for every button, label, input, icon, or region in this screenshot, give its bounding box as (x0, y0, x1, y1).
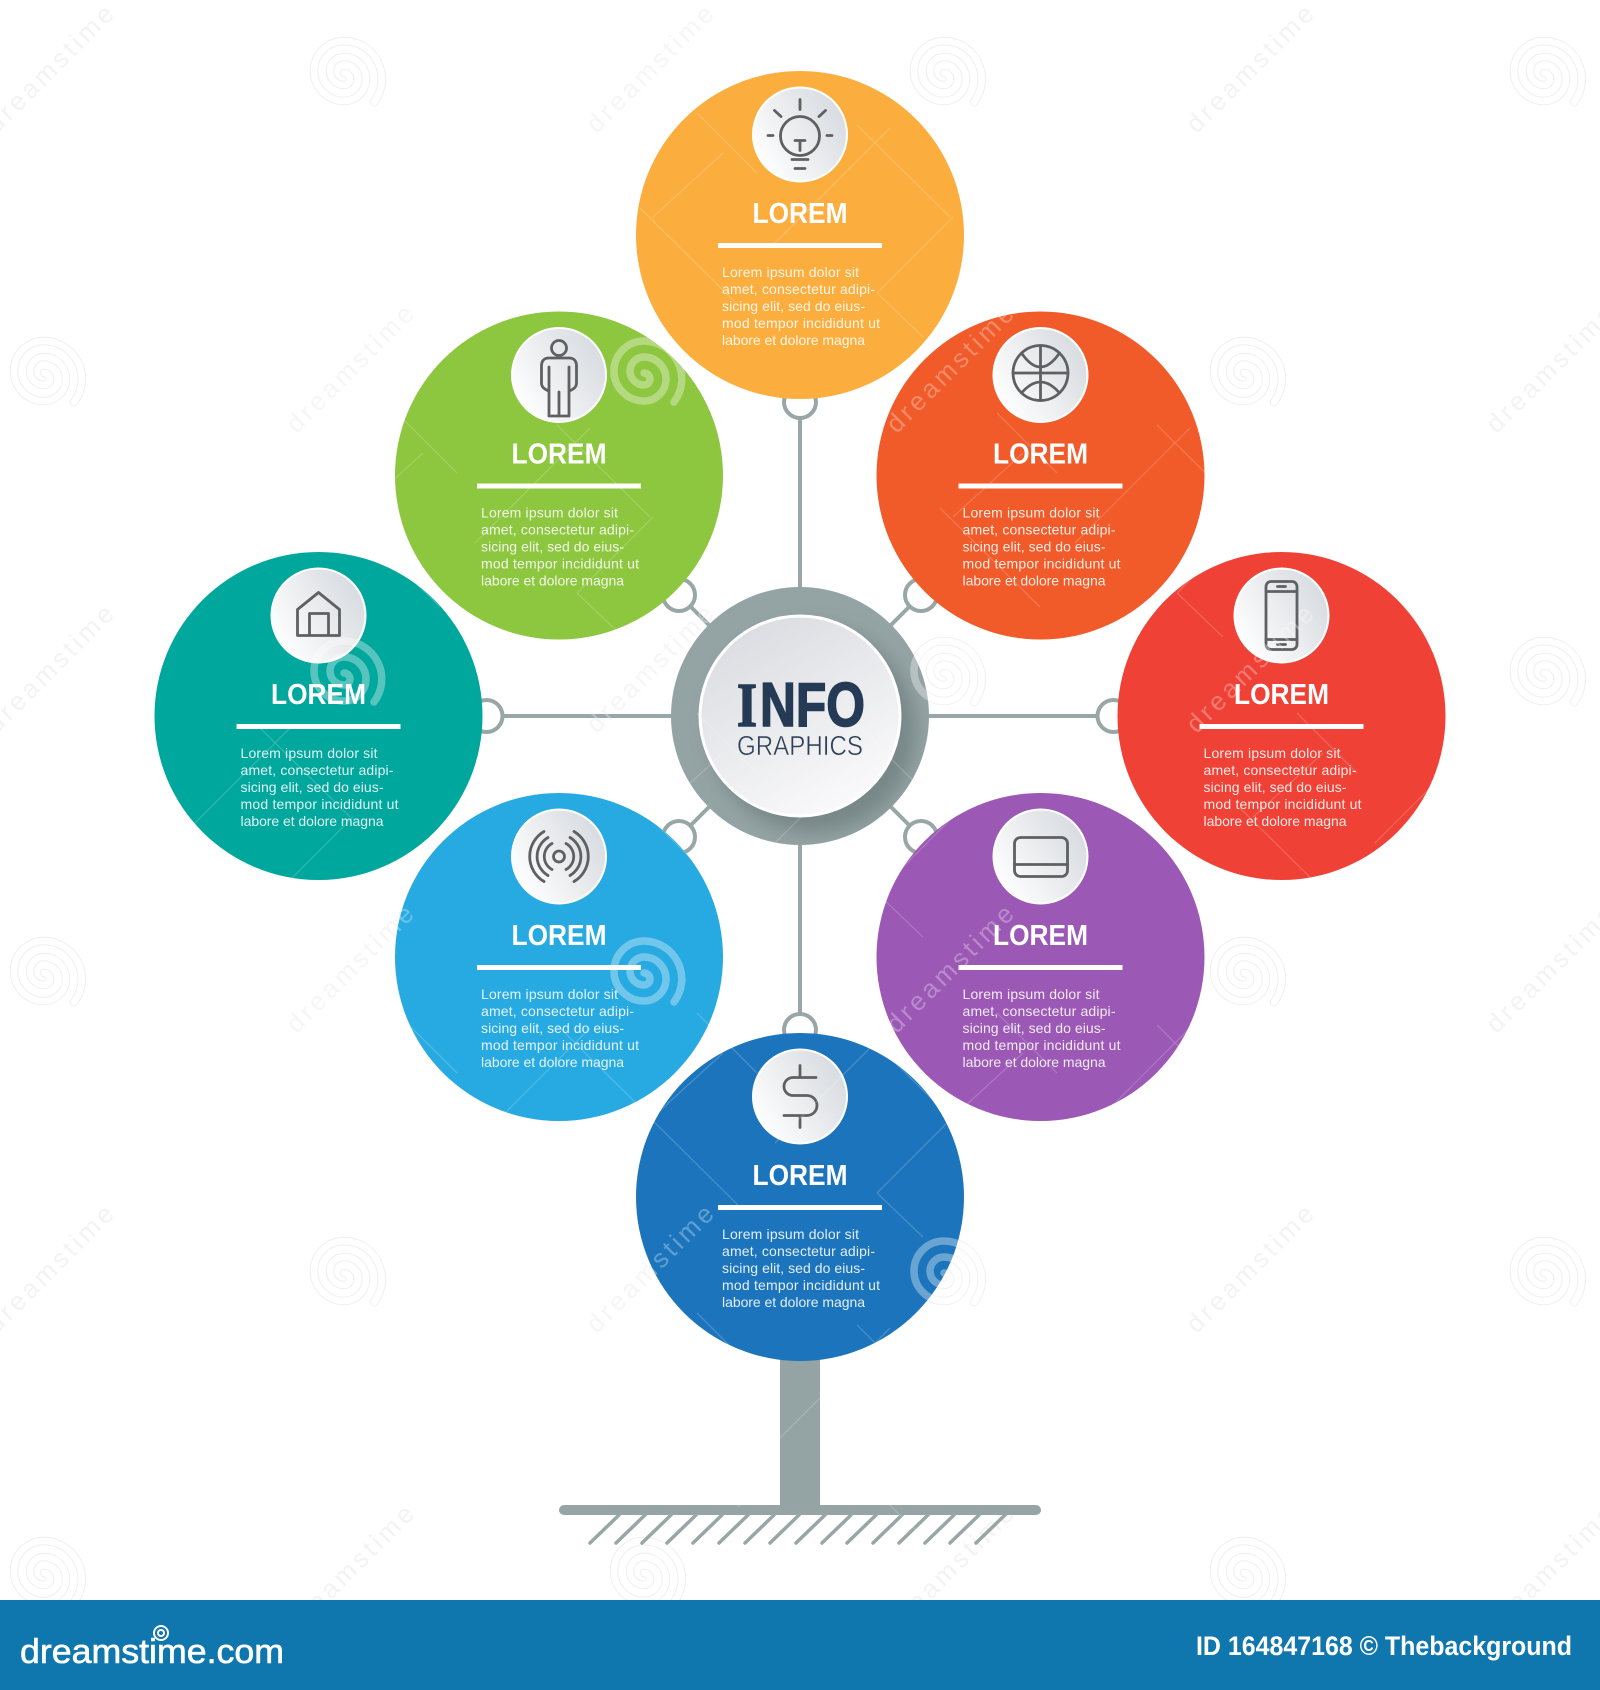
body text: Lorem ipsum dolor sit (240, 745, 378, 761)
watermark layer on white: dreamstime (580, 0, 720, 139)
heading: LOREM (1234, 679, 1329, 711)
watermark layer over shapes: dreamstime (280, 899, 420, 1039)
body text: sicing elit, sed do eius- (962, 538, 1106, 554)
icon: card (994, 810, 1088, 904)
icon: house (272, 568, 366, 662)
body text: Lorem ipsum dolor sit (962, 504, 1100, 520)
body text: amet, consectetur adipi- (481, 522, 634, 538)
body text: sicing elit, sed do eius- (481, 538, 624, 554)
body text: mod tempor incididunt ut (240, 796, 399, 812)
body text: Lorem ipsum dolor sit (481, 504, 618, 520)
body text: mod tempor incididunt ut (481, 556, 639, 572)
watermark layer on white: dreamstime (1180, 0, 1320, 139)
hub disc (700, 616, 900, 816)
panel: upper-left green (395, 312, 723, 640)
body text (481, 504, 639, 588)
body text: sicing elit, sed do eius- (240, 779, 384, 795)
icon: smartphone (1234, 568, 1328, 662)
body text: amet, consectetur adipi- (722, 1243, 875, 1259)
tree trunk and ground (559, 1340, 1041, 1543)
watermark layer over shapes: dreamstime (880, 899, 1020, 1039)
watermark layer over shapes: dreamstime (1180, 599, 1320, 739)
hub ring (671, 587, 929, 845)
heading: LOREM (271, 679, 366, 711)
body text: mod tempor incididunt ut (722, 315, 880, 331)
body text: sicing elit, sed do eius- (962, 1020, 1106, 1036)
footer credit: ID 164847168 © Thebackground (1196, 1631, 1572, 1661)
icon: footer swirl (154, 1626, 168, 1640)
footer bar (0, 1600, 1600, 1690)
watermark layer on white: dreamstime (1180, 1199, 1320, 1339)
hub subtitle GRAPHICS: GRAPHICS (737, 730, 863, 761)
body text: labore et dolore magna (962, 572, 1106, 588)
body text (722, 1226, 880, 1310)
body text: mod tempor incididunt ut (962, 1037, 1121, 1053)
body text: amet, consectetur adipi- (962, 522, 1116, 538)
watermark layer on white: dreamstime (280, 1499, 420, 1639)
body text: mod tempor incididunt ut (1204, 796, 1362, 812)
body text: sicing elit, sed do eius- (722, 298, 865, 314)
body text: Lorem ipsum dolor sit (722, 264, 859, 280)
heading: LOREM (512, 438, 606, 470)
panel: right red (1118, 552, 1446, 880)
watermark layer on white: dreamstime (880, 1499, 1020, 1639)
body text (962, 504, 1121, 588)
hub title INFO: NFO (760, 671, 865, 740)
watermark layer on white: dreamstime (280, 299, 420, 439)
body text (481, 986, 639, 1070)
watermark layer over shapes: dreamstime (580, 599, 720, 739)
body text: labore et dolore magna (481, 572, 624, 588)
footer logo: dreamstime.com (20, 1633, 284, 1671)
central hub (671, 587, 929, 845)
body text: amet, consectetur adipi- (962, 1003, 1116, 1019)
body text: labore et dolore magna (481, 1054, 624, 1070)
body text: labore et dolore magna (962, 1054, 1106, 1070)
body text: amet, consectetur adipi- (481, 1003, 634, 1019)
heading: LOREM (752, 1160, 848, 1192)
body text: Lorem ipsum dolor sit (1204, 745, 1341, 761)
icon: basketball (994, 328, 1088, 422)
body text: sicing elit, sed do eius- (481, 1020, 624, 1036)
body text (962, 986, 1121, 1070)
body text (240, 745, 399, 829)
body text: Lorem ipsum dolor sit (481, 986, 618, 1002)
icon: light bulb (753, 88, 847, 182)
watermark layer on white: dreamstime (280, 899, 420, 1039)
body text: labore et dolore magna (240, 813, 384, 829)
icon: signal (512, 810, 606, 904)
heading: LOREM (993, 438, 1088, 470)
watermark layer over shapes: dreamstime (280, 299, 420, 439)
heading: LOREM (512, 920, 606, 952)
body text: amet, consectetur adipi- (1204, 762, 1357, 778)
body text: labore et dolore magna (722, 1294, 865, 1310)
panel: top orange (636, 71, 964, 399)
body text: sicing elit, sed do eius- (722, 1260, 865, 1276)
body text: amet, consectetur adipi- (722, 281, 875, 297)
body text: mod tempor incididunt ut (962, 556, 1121, 572)
watermark layer over shapes: dreamstime (880, 299, 1020, 439)
body text: mod tempor incididunt ut (722, 1277, 880, 1293)
body text: labore et dolore magna (722, 332, 865, 348)
watermark layer over shapes: dreamstime (580, 0, 720, 139)
panel: lower-right purple (876, 793, 1204, 1121)
body text: labore et dolore magna (1204, 813, 1347, 829)
panel: lower-left light blue (395, 793, 723, 1121)
icon: dollar (753, 1050, 847, 1144)
body text (722, 264, 880, 348)
panel: left teal (154, 552, 482, 880)
panel: bottom blue (636, 1033, 964, 1361)
body text: amet, consectetur adipi- (240, 762, 394, 778)
watermark layer on white: dreamstime (1180, 599, 1320, 739)
body text (1204, 745, 1362, 829)
connectors with end rings (470, 386, 1130, 1046)
body text: Lorem ipsum dolor sit (722, 1226, 859, 1242)
heading: LOREM (993, 920, 1088, 952)
panel: upper-right red-orange (876, 312, 1204, 640)
heading: LOREM (752, 198, 848, 230)
icon: person (512, 328, 606, 422)
body text: sicing elit, sed do eius- (1204, 779, 1347, 795)
watermark layer on white: dreamstime (580, 1199, 720, 1339)
body text: Lorem ipsum dolor sit (962, 986, 1100, 1002)
watermark layer over shapes: dreamstime (580, 1199, 720, 1339)
watermark layer on white: dreamstime (580, 599, 720, 739)
body text: mod tempor incididunt ut (481, 1037, 639, 1053)
hub title INFO: I (737, 672, 757, 740)
